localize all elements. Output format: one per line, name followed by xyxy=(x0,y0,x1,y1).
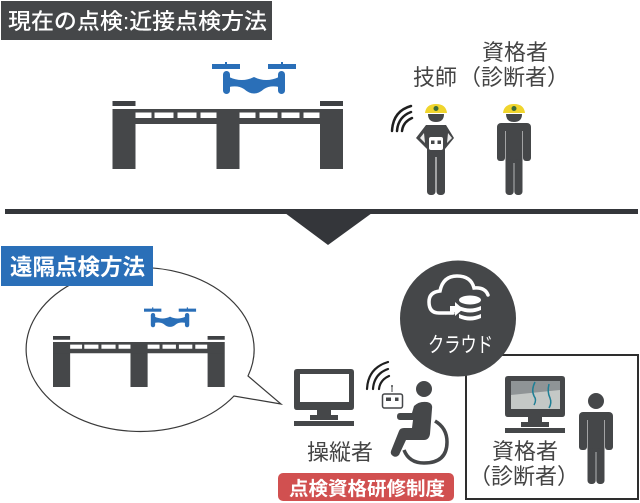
heading: remote inspection xyxy=(1,246,153,286)
divider bar xyxy=(5,209,638,214)
label: diagnostician in box: 資格者 xyxy=(492,439,558,464)
icon: inspection drone xyxy=(212,62,296,94)
label: operator: 操縦者 xyxy=(307,440,373,465)
badge: inspection qualification training: 点検資格研修制度 xyxy=(289,478,445,500)
icon: operator monitor xyxy=(294,369,354,426)
badge: inspection qualification training xyxy=(278,473,454,501)
icon: operator wireless signal xyxy=(367,362,389,389)
label: diagnostician in box xyxy=(469,439,579,489)
label: qualified diagnostician xyxy=(459,40,569,90)
icon: diagnostician with helmet xyxy=(497,104,531,195)
title: current inspection xyxy=(1,1,272,40)
icon: cloud circle xyxy=(400,260,516,376)
label: qualified diagnostician: 資格者 xyxy=(482,40,548,65)
icon: large bridge xyxy=(112,101,343,169)
arrow: down xyxy=(285,213,372,245)
speech bubble xyxy=(26,267,281,431)
icon: small bridge xyxy=(53,336,225,387)
panel: diagnostician box xyxy=(466,355,638,499)
icon: cloud and database xyxy=(429,276,488,320)
icon: diagnostician xyxy=(579,393,613,484)
icon: wireless signal xyxy=(392,106,412,131)
label: technician: 技師 xyxy=(413,65,457,90)
label: cloud: クラウド xyxy=(428,334,493,357)
title: current inspection: 現在の点検:近接点検方法 xyxy=(8,9,267,34)
icon: remote controller xyxy=(382,385,402,408)
icon: wheelchair operator xyxy=(391,381,447,463)
icon: small drone xyxy=(144,307,196,327)
icon: technician with controller xyxy=(416,104,454,195)
heading: remote inspection: 遠隔点検方法 xyxy=(10,255,145,280)
label: qualified diagnostician: （診断者） xyxy=(459,65,569,90)
icon: monitor with crack image xyxy=(505,376,565,433)
label: diagnostician in box: （診断者） xyxy=(469,464,579,489)
